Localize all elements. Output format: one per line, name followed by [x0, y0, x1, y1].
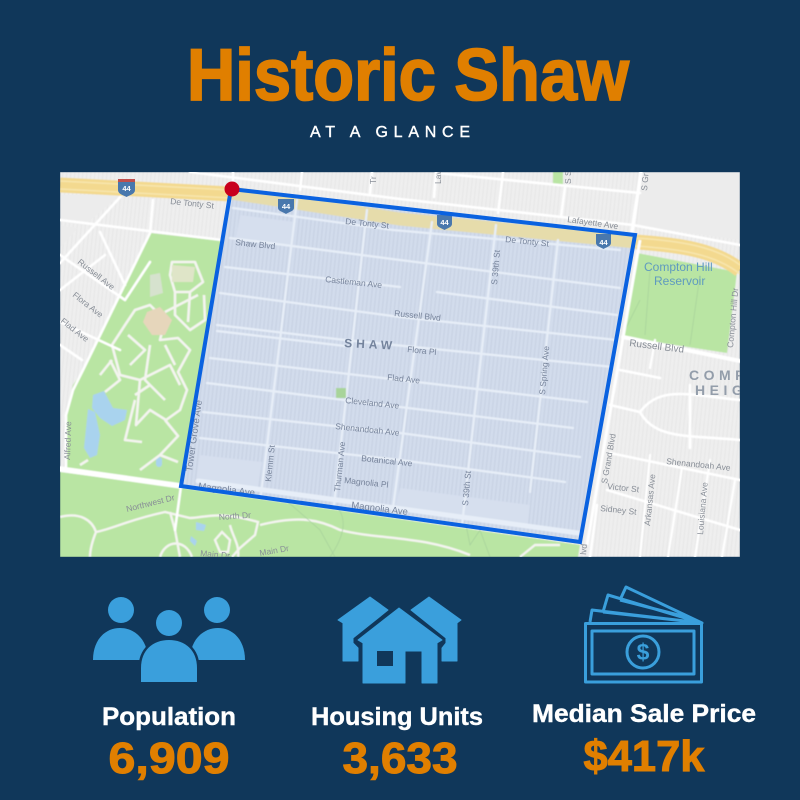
map street labels: Reservoir: [654, 274, 705, 288]
icon: money: [586, 587, 702, 682]
neighbourhood streets: [198, 200, 620, 533]
shield 1: 44: [122, 184, 131, 193]
small green square: [553, 172, 563, 185]
map: [59, 168, 792, 561]
map street labels: lvd: [578, 543, 589, 555]
shield 3: [437, 215, 452, 230]
shield 2: 44: [282, 202, 291, 211]
map street labels: Northwest Dr: [125, 492, 176, 514]
map street labels: SHAW: [344, 336, 397, 353]
map street labels: S 39th St: [460, 470, 473, 506]
map street labels: Shaw Blvd: [235, 237, 276, 251]
map street labels: Compton Hill: [644, 260, 713, 274]
title: Historic Shaw: [187, 35, 629, 116]
icon: money: $: [637, 639, 650, 665]
interstate shields: [118, 179, 611, 249]
map street labels: Flora Pl: [407, 344, 437, 357]
shield 4: [596, 234, 611, 249]
map street labels: COMPTON: [689, 367, 792, 383]
map street labels: S Gr: [639, 173, 651, 191]
stat: population: [102, 703, 236, 783]
southern park paths: [60, 512, 560, 557]
shield 2: [278, 199, 294, 214]
map street labels: Castleman Ave: [325, 274, 383, 290]
neighbourhood shading: [181, 189, 635, 542]
map street labels: Klemm St: [263, 444, 277, 482]
map street labels: Russell Blvd: [629, 338, 685, 356]
map street labels: Tr: [368, 176, 378, 184]
Interstate 44 highway: [60, 181, 740, 274]
map street labels: Russell Ave: [76, 257, 117, 292]
park thin lines: [280, 270, 700, 557]
map street labels: S Spring Ave: [537, 345, 551, 395]
neighbourhood boundary: [181, 189, 635, 542]
stat: housing units: [311, 703, 483, 783]
map street labels: Law: [433, 168, 443, 184]
map street labels: S Grand Blvd: [599, 433, 618, 484]
stat: median sale price: Median Sale Price: [532, 700, 756, 728]
map street labels: North Dr: [218, 510, 251, 522]
map street labels: Main Dr: [200, 548, 231, 561]
map street labels: Thurman Ave: [332, 441, 347, 492]
stat: population: 6,909: [108, 734, 230, 783]
Tower Grove Park: [65, 233, 222, 486]
map street labels: S S: [563, 170, 573, 184]
stat: median sale price: [532, 700, 756, 781]
map street labels: Sidney St: [600, 503, 638, 517]
icon: houses: [338, 597, 461, 683]
map street labels: Magnolia Pl: [344, 475, 389, 490]
map street labels: [59, 168, 792, 561]
map street labels: De Tonty St: [345, 216, 390, 231]
map street labels: Tower Grove Ave: [184, 399, 205, 472]
map street labels: Compton Hill Dr: [725, 287, 740, 348]
park paths: [80, 262, 205, 470]
subtitle: AT A GLANCE: [310, 124, 470, 141]
map street labels: De Tonty St: [505, 234, 550, 249]
streets outside the neighbourhood: [60, 172, 740, 557]
map street labels: Magnolia Ave: [351, 500, 408, 518]
park lakes: [84, 391, 206, 546]
shield 3: 44: [440, 218, 449, 227]
map street labels: Victor St: [607, 481, 640, 494]
map street labels: HEIGHTS: [695, 382, 789, 398]
map street labels: Louisiana Ave: [695, 481, 710, 535]
stat: median sale price: $417k: [584, 732, 705, 781]
main street on the east boundary: [587, 240, 640, 545]
red start marker: [224, 182, 240, 196]
map base: [60, 172, 740, 557]
map street labels: Flora Ave: [71, 290, 105, 320]
map street labels: Flad Ave: [387, 372, 421, 385]
shield 4: 44: [599, 238, 608, 247]
stat: population: Population: [102, 703, 236, 731]
stat: housing units: Housing Units: [311, 703, 483, 731]
map street labels: Alfred Ave: [62, 421, 73, 460]
icon: people: [93, 597, 245, 682]
map street labels: Shenandoah Ave: [335, 421, 400, 438]
map street labels: S 39th St: [489, 249, 502, 285]
map street labels: Botanical Ave: [361, 453, 413, 468]
shield 1: [118, 179, 135, 197]
stat: housing units: 3,633: [342, 734, 458, 783]
Compton Hill Reservoir park: [623, 253, 737, 353]
Southern park: [60, 472, 580, 557]
map street labels: Cleveland Ave: [345, 395, 400, 411]
map street labels: Shenandoah Ave: [666, 456, 731, 473]
map street labels: Russell Blvd: [394, 308, 442, 323]
map street labels: Main Dr: [259, 543, 290, 558]
plain land blocks: [60, 172, 740, 248]
map street labels: Arkansas Ave: [642, 473, 657, 526]
map street labels: Flad Ave: [59, 316, 91, 344]
small pocket park: [336, 388, 346, 398]
map street labels: Lafayette Ave: [567, 214, 619, 231]
map street labels: De Tonty St: [170, 196, 215, 211]
map street labels: Magnolia Ave: [198, 481, 255, 499]
plain blocks inside neighbourhood: [196, 215, 530, 525]
